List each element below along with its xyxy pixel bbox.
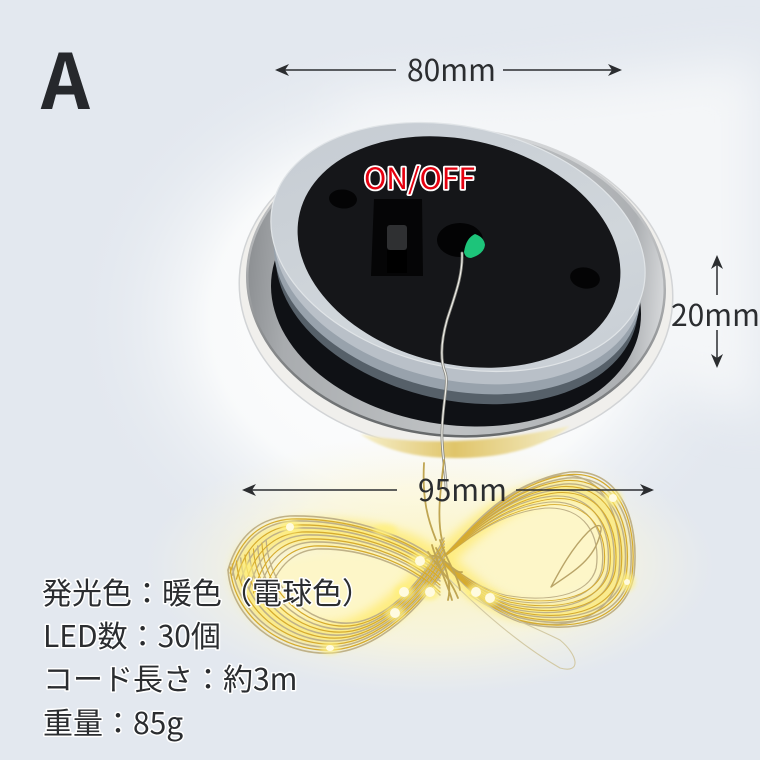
dimension: 95mm: 95mm (418, 466, 507, 510)
LED count: LED数：30個 (43, 612, 221, 656)
on/off label: ON/OFF (364, 156, 475, 198)
dark gasket (254, 150, 658, 450)
LED halos (240, 490, 635, 654)
inner right wire loop (551, 526, 601, 587)
wire (442, 253, 462, 490)
weight: 重量：85g (43, 699, 183, 743)
switch (371, 199, 423, 276)
wire hole and green bead (437, 223, 485, 258)
yellow glow (244, 489, 618, 635)
mounting hole left (328, 188, 358, 210)
loose tail (445, 575, 575, 669)
dimension: 80mm: 80mm (407, 46, 496, 90)
dimension: 20mm (671, 255, 760, 368)
translucent ring top (246, 87, 670, 407)
translucent ring side layers (249, 103, 667, 438)
LED lights (286, 494, 630, 651)
dimension: 80mm (275, 46, 622, 90)
knot (424, 460, 462, 600)
metal dish (228, 114, 684, 466)
product photo: solar light disc (228, 87, 684, 490)
cord length: コード長さ：約3m (43, 655, 297, 699)
LED string lights (228, 460, 635, 669)
black disc (273, 104, 645, 400)
mounting hole right (568, 265, 602, 291)
left loop strands (228, 516, 445, 653)
title letter A: A (40, 21, 91, 131)
dimension: 20mm: 20mm (671, 291, 760, 335)
gold base glow (360, 426, 570, 458)
right loop strands (445, 472, 635, 627)
light colour: 発光色：暖色（電球色） (42, 569, 372, 613)
specifications list (42, 569, 372, 743)
dimension: 95mm (242, 466, 654, 510)
pale yellow interior (250, 490, 615, 628)
